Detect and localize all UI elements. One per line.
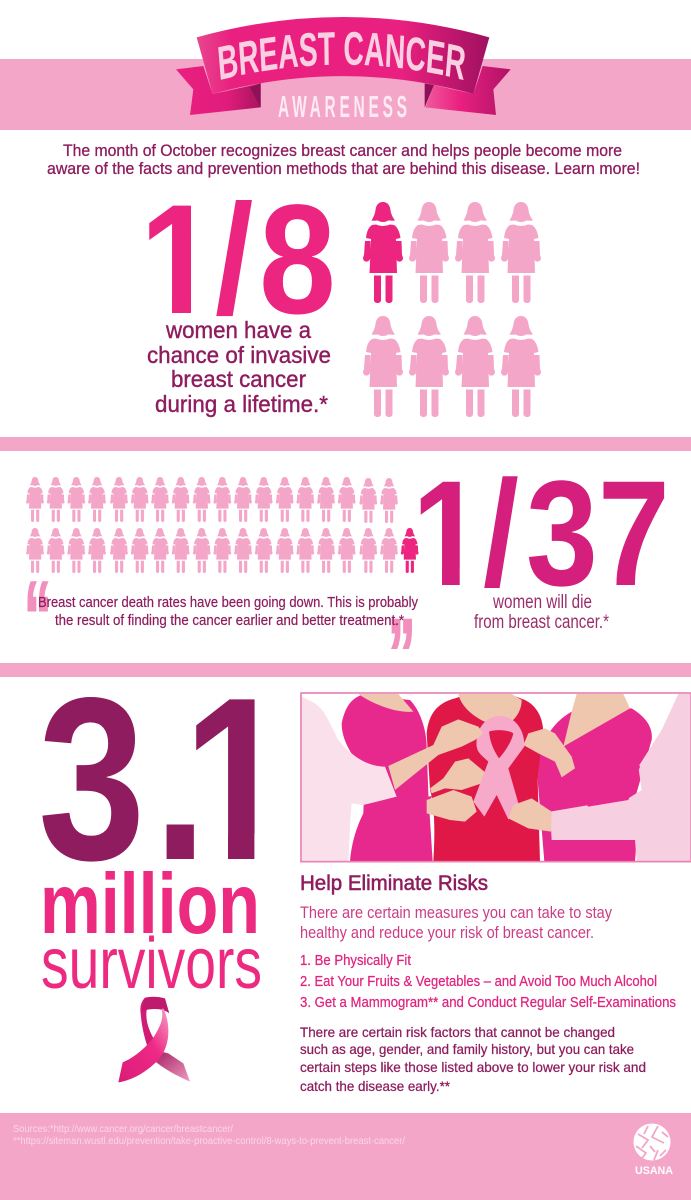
intro paragraph: [300, 903, 612, 942]
million: million: [40, 857, 260, 952]
sources: **https://siteman.wustl.edu/prevention/take-proactive-control/8-ways-to-prevent-breast-cancer/: [13, 1135, 405, 1147]
subtitle: AWARENESS: [278, 90, 407, 125]
logo wordmark: USANA: [635, 1165, 673, 1177]
caption for 1/8: during a lifetime.*: [155, 391, 328, 417]
footer band: [0, 1113, 691, 1200]
intro paragraph: There are certain measures you can take to stay: [300, 903, 612, 922]
intro text: [47, 141, 640, 178]
icon: pink awareness ribbon: [118, 997, 190, 1082]
survivors: survivors: [41, 924, 262, 1004]
pictogram: 1 of 37 women: [26, 477, 419, 573]
statistic 3.1: 3.1: [38, 650, 290, 909]
photo: women holding pink ribbon: [301, 693, 691, 862]
caption for 1/8: breast cancer: [171, 366, 306, 392]
intro text: The month of October recognizes breast cancer and helps people become more: [63, 141, 622, 160]
quote text: Breast cancer death rates have been going down. This is probably: [38, 595, 419, 611]
intro paragraph: healthy and reduce your risk of breast cancer.: [300, 923, 594, 942]
caption for 1/37: from breast cancer.*: [474, 612, 609, 633]
quote text: the result of finding the cancer earlier and better treatment.*: [55, 613, 404, 629]
statistic 1/8: 1/8: [140, 173, 336, 347]
numbered list: [300, 953, 676, 1011]
numbered list: 1. Be Physically Fit: [300, 953, 411, 969]
caption for 1/8: women have a: [165, 317, 311, 343]
caption for 1/37: women will die: [492, 592, 592, 613]
risk factors paragraph: such as age, gender, and family history, but you can take: [300, 1041, 634, 1057]
risk factors paragraph: [300, 1024, 646, 1094]
logo: USANA: [634, 1124, 673, 1177]
caption for 1/8: chance of invasive: [147, 342, 331, 368]
sources: [13, 1123, 405, 1147]
risk factors paragraph: There are certain risk factors that cannot be changed: [300, 1024, 615, 1040]
title ribbon banner: [176, 17, 510, 115]
caption for 1/8: [147, 317, 331, 417]
sources: Sources:*http://www.cancer.org/cancer/breastcancer/: [13, 1123, 233, 1135]
intro text: aware of the facts and prevention methods that are behind this disease. Learn more!: [47, 159, 640, 178]
closing quote mark: ”: [388, 600, 415, 711]
heading: help eliminate risks: Help Eliminate Risks: [300, 872, 488, 895]
statistic 1/37: 1/37: [412, 449, 670, 617]
quote text: [38, 595, 419, 629]
risk factors paragraph: catch the disease early.**: [300, 1078, 451, 1094]
caption for 1/37: [474, 592, 609, 633]
risk factors paragraph: certain steps like those listed above to lower your risk and: [300, 1059, 646, 1075]
pictogram: 1 of 8 women: [363, 202, 541, 417]
title text: BREAST CANCER: [218, 32, 465, 80]
header band: [0, 59, 691, 130]
numbered list: 2. Eat Your Fruits & Vegetables – and Avoid Too Much Alcohol: [300, 974, 657, 990]
opening quote mark: “: [24, 562, 51, 673]
